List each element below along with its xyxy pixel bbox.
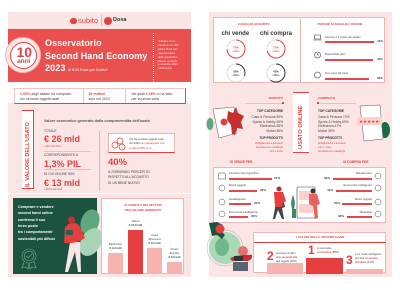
list: Elettronica 38%	[260, 124, 283, 128]
brand logos: Doxa	[113, 17, 126, 23]
column: venduto	[245, 96, 284, 153]
list: Libri e riviste	[318, 146, 331, 149]
banner note	[158, 40, 178, 70]
buy rows: Rivivi oggetti	[355, 197, 372, 201]
bar: elettronica: € 4,9 mld	[110, 246, 121, 250]
stat: pil: 1,3% PIL	[44, 158, 81, 168]
reason bars: 46%	[377, 56, 383, 60]
bar: casa: € 3,5 mld	[148, 241, 160, 245]
heading: canali: CANALI DI ACQUISTO	[238, 22, 270, 26]
bar: sports: &Hobby	[170, 251, 179, 255]
bar 2	[267, 263, 303, 274]
donuts: offline	[272, 73, 280, 77]
value 3: 3	[346, 253, 353, 267]
list: Abbigliamento e accessori	[255, 142, 283, 145]
sell rows: 33%	[254, 200, 260, 204]
buy rows	[324, 171, 372, 218]
donuts: online	[232, 49, 240, 53]
chart title: PER VALORE GENERATO	[125, 208, 161, 212]
title	[45, 38, 148, 73]
bar: casa: Casa	[151, 233, 158, 237]
card title: I VALORI DELLA SECOND HAND	[296, 235, 344, 239]
reason bars: Internet è il posto più adatto	[325, 34, 361, 38]
sell rows: 37%	[274, 176, 280, 180]
bar: sports	[167, 247, 182, 273]
value 3: circolare (47%)	[355, 261, 374, 264]
value 2: permette di dare	[276, 252, 296, 255]
stats box: per la prima volta	[132, 97, 159, 101]
bar 1	[306, 258, 343, 274]
value 3: per fare economia	[355, 257, 378, 260]
value 2: agli oggetti (49%)	[276, 260, 297, 263]
illustration: phone with stars: ★★★★★	[359, 119, 380, 124]
list: Motori 36%	[266, 128, 283, 132]
divider	[98, 131, 100, 191]
donuts: 71%	[273, 46, 279, 50]
bar 3	[346, 269, 383, 274]
illustration: person with leaves	[64, 209, 101, 272]
heading: perché: PERCHÉ SI SCEGLIE L'ONLINE	[318, 22, 362, 26]
banner note: CAWI online	[158, 67, 172, 70]
buy rows: Abitudine	[359, 210, 372, 214]
icon: badge	[22, 248, 36, 270]
stat: online: +100% dal 2014	[44, 188, 62, 191]
reason bars: Non esco da casa	[325, 70, 348, 74]
illustration: globe with figures	[206, 222, 252, 271]
bar: motori: € 10,9 mld	[129, 223, 142, 227]
stat: totale	[44, 129, 80, 148]
column: venduto: VENDUTO	[268, 96, 283, 100]
value 1: è una scelta	[317, 247, 332, 250]
value 1	[308, 243, 339, 257]
vertical label	[22, 110, 34, 189]
left page background	[8, 12, 191, 82]
bar: casa: &Persona	[148, 237, 161, 241]
reason bars: Disponibile 24/7	[325, 52, 346, 56]
illustration: phone and hero	[206, 106, 244, 138]
stat: online: DI CUI ONLINE 50%	[44, 172, 75, 176]
value 3: è un modo intelligente	[355, 253, 381, 256]
callout: coins: nel 2023 ha guadagnato una	[129, 141, 165, 145]
column: comprato	[317, 96, 356, 153]
column: comprato: COMPRATO	[318, 96, 335, 100]
donuts: 30%	[233, 70, 239, 74]
badge: 10 anni: anni	[17, 58, 30, 64]
sell rows	[229, 171, 280, 218]
brand logos	[70, 15, 126, 26]
callout: coins: media di 850 euro	[129, 146, 151, 150]
reason bars: 44%	[377, 38, 383, 42]
green panel text	[18, 205, 55, 241]
card: i valori	[253, 232, 386, 273]
banner note: campione di 1.000	[158, 44, 178, 47]
buy rows: 69%	[324, 176, 330, 180]
value 3	[346, 253, 382, 267]
buy rows: 38%	[338, 214, 344, 218]
sell rows: Rivivi oggetti	[229, 182, 246, 186]
list: Motori 39%	[318, 128, 335, 132]
callout: coins: Chi ha venduto oggetti usati	[129, 137, 164, 141]
donuts: 75%	[233, 46, 239, 50]
chart title	[124, 202, 162, 212]
panel: il valore dell'usato	[8, 103, 191, 193]
sell rows: Guadagnare	[229, 197, 246, 201]
list: Libri e riviste	[270, 150, 283, 153]
bar: sports: € 3,2 mld	[168, 255, 180, 259]
list	[318, 115, 350, 132]
banner note: a novembre 2023	[158, 63, 177, 66]
text: risparmio: IL RISPARMIO PERCEPITO	[108, 170, 150, 174]
reason bars	[313, 34, 383, 80]
green panel text: second hand online	[18, 211, 53, 215]
heading: si vende per: SI VENDE PER	[230, 160, 252, 164]
banner divider	[153, 33, 154, 82]
list: Casa & Persona 59%	[251, 115, 283, 119]
divider	[299, 19, 302, 82]
list	[255, 142, 283, 153]
bar: motori: Motori	[132, 219, 139, 223]
green panel text: tra i comportamenti	[18, 230, 52, 234]
bar: motori	[128, 219, 143, 274]
stats box: e/o venduto oggetti usati	[20, 97, 59, 101]
badge: 10 anni: 10	[16, 44, 32, 60]
bar: sports: Sports	[170, 247, 179, 251]
bar: casa	[147, 233, 162, 273]
donuts: 60%	[273, 70, 279, 74]
label: chi compra: chi compra	[260, 31, 292, 37]
donuts	[226, 40, 286, 82]
heading: si compra per: SI COMPRA PER	[343, 160, 368, 164]
reason bars: 38%	[377, 76, 383, 80]
bar: elettronica	[108, 242, 123, 273]
donuts: offline	[232, 73, 240, 77]
chart title: CLASSIFICA DEI SETTORI	[124, 202, 162, 206]
tag: top prodotti venduto: TOP PRODOTTI	[259, 136, 283, 140]
stats box: 26 milioni	[88, 92, 105, 96]
right page background	[209, 12, 392, 277]
panel: bottom left	[8, 193, 191, 277]
usato online label: USATO ONLINE	[298, 106, 304, 149]
tag: top categorie comprato: TOP CATEGORIE	[318, 109, 344, 113]
value 2: 2	[267, 249, 274, 263]
tag: top prodotti comprato: TOP PRODOTTI	[318, 136, 342, 140]
brand logos: subito	[78, 16, 98, 25]
card: motivations	[213, 167, 386, 223]
stats box: 1 60% degli italiani ha comprato	[20, 92, 71, 96]
buy rows: Risparmiare	[356, 171, 372, 175]
vertical label: IL VALORE DELL'USATO	[24, 122, 30, 187]
green panel text: terzo posto	[18, 224, 38, 228]
sell rows: 30%	[251, 214, 257, 218]
title: Second Hand Economy	[45, 51, 147, 61]
banner note: della popolazione	[158, 56, 177, 59]
value 2	[267, 249, 298, 263]
green panel text: conferma il suo	[18, 218, 45, 222]
title: Osservatorio	[45, 38, 102, 48]
buy rows: 39%	[334, 200, 340, 204]
list: Arredamento e casalinghi	[256, 146, 283, 149]
tag: top categorie venduto: TOP CATEGORIE	[257, 109, 283, 113]
label: chi vende: chi vende	[222, 31, 249, 37]
green panel text: sostenibili più diffusi	[18, 237, 55, 241]
stat: pil	[44, 151, 91, 170]
title: 2023 di BVA Doxa per Subito*	[45, 63, 108, 73]
stats box: solo nel 2023	[88, 97, 110, 101]
stats box: dei quali il 18% lo ha fatto	[132, 92, 172, 96]
banner note: *indagine su un	[158, 40, 175, 43]
heading: Valore economico generato dalla compravendita dell'usato	[44, 119, 150, 123]
text: risparmio: DI UN BENE NUOVO	[108, 181, 140, 185]
stat: 40%: 40%	[108, 157, 127, 168]
stat: totale: TOTALE	[44, 129, 57, 133]
green panel	[13, 198, 97, 274]
list: Casa & Persona 72%	[318, 115, 350, 119]
stats box	[14, 88, 186, 104]
donuts: online	[272, 49, 280, 53]
illustration: phone with stars	[357, 104, 390, 142]
sell rows: Liberarsi del superfluo	[229, 171, 259, 175]
list: Elettronica 47%	[318, 124, 341, 128]
list: Arredamento e casalinghi	[318, 150, 345, 153]
buy rows: Economia intelligente	[343, 182, 372, 186]
value 1: 1	[308, 243, 315, 257]
buy rows: 44%	[327, 188, 333, 192]
sell rows: Economia intelligente	[229, 210, 258, 214]
usato online label	[293, 92, 309, 153]
list	[251, 115, 283, 132]
illustration: people with phone	[273, 186, 320, 219]
banner note: italiani 18-64 anni	[158, 48, 178, 51]
banner note: italiana, condotta	[158, 60, 177, 63]
badge: 10 anni	[5, 37, 41, 73]
stat: pil: CORRISPONDENTE A	[44, 153, 78, 157]
list: Abbigliamento e accessori	[318, 142, 346, 145]
bar: elettronica: Elettronica	[109, 242, 122, 246]
icons right	[374, 172, 382, 218]
stat: online: € 13 mld	[44, 178, 80, 188]
callout: coins	[108, 133, 175, 153]
green panel text: Comprare e vendere	[18, 205, 54, 209]
value 2: una seconda vita	[276, 256, 298, 259]
sell rows: 36%	[260, 188, 266, 192]
banner note: rappresentativo	[158, 52, 175, 55]
text: risparmio	[108, 170, 150, 185]
value 1: economica (52%)	[317, 251, 339, 254]
list: Sports & Hobby 45%	[252, 120, 283, 124]
card: canali e perché	[213, 17, 385, 83]
stat: totale: +44% dal 2014	[44, 145, 61, 148]
stat: online	[44, 169, 91, 192]
red banner	[8, 29, 191, 82]
list	[318, 142, 346, 153]
text: risparmio: RISPETTO ALL'ACQUISTO	[108, 175, 149, 179]
stat: totale: € 26 mld	[44, 134, 80, 144]
chart card	[101, 198, 184, 274]
icons left	[218, 172, 226, 218]
list: Sports & Hobby 60%	[318, 120, 349, 124]
